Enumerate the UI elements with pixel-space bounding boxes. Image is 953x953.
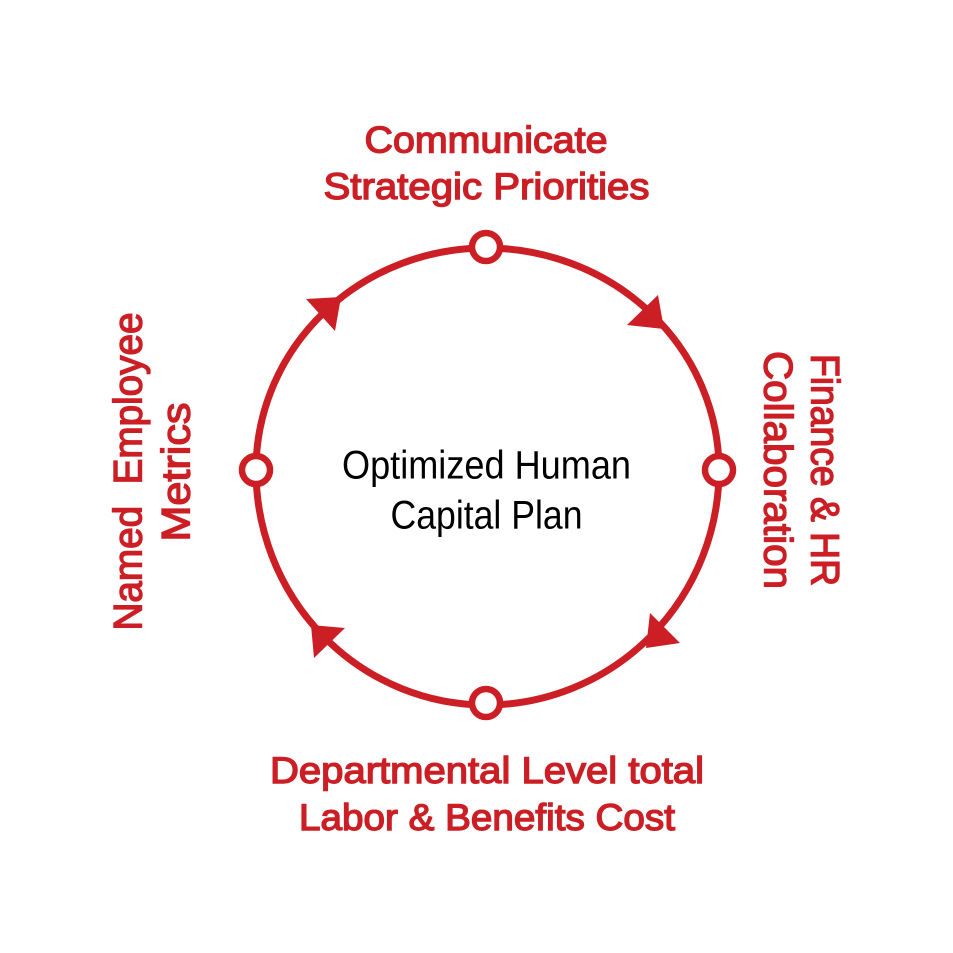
label: right	[756, 351, 846, 589]
label: bottom	[270, 750, 704, 838]
label: left	[106, 312, 198, 630]
arrow: top left	[306, 297, 341, 331]
label: top: Strategic Priorities	[324, 166, 650, 207]
node: right	[705, 456, 733, 484]
center label: Optimized Human	[342, 444, 631, 488]
label: top	[324, 120, 650, 207]
label: bottom: Departmental Level total	[270, 750, 704, 791]
cycle ring	[256, 248, 719, 705]
label: right: Collaboration	[756, 351, 800, 589]
arrow: bottom right	[646, 613, 680, 648]
node: top	[472, 233, 500, 261]
center label: Capital Plan	[390, 494, 582, 538]
center label	[342, 444, 631, 538]
arrow: bottom left	[311, 625, 345, 658]
label: left: Metrics	[154, 402, 198, 542]
label: right: Finance & HR	[802, 354, 846, 586]
label: bottom: Labor & Benefits Cost	[299, 797, 676, 838]
label: top: Communicate	[364, 120, 608, 160]
node: bottom	[472, 689, 500, 717]
arrow: top right	[627, 295, 664, 329]
node: left	[242, 456, 270, 484]
label: left: Named Employee	[106, 312, 150, 630]
